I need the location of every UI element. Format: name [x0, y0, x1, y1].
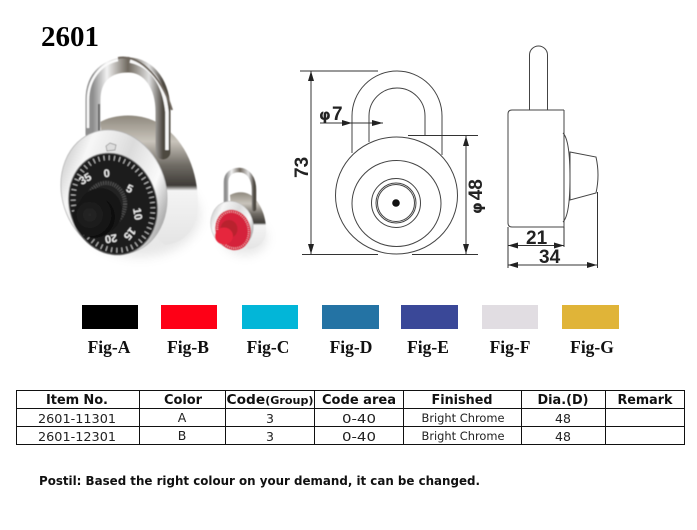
body circles [336, 137, 458, 254]
table row 1: Bright Chrome [422, 411, 504, 425]
black dial [56, 142, 170, 266]
dimension: 34 [508, 192, 598, 268]
small shackle [226, 170, 254, 209]
gate notch [106, 143, 116, 151]
dimension: phi 48: φ48 [466, 179, 487, 214]
table row 1: 48 [555, 411, 571, 426]
dial numbers: 15 [121, 225, 138, 242]
side face and knob [563, 133, 598, 222]
table row 1 [38, 410, 571, 426]
photo: small red combination padlock [205, 170, 267, 255]
dial numbers: 10 [130, 207, 144, 221]
dimension: 21 [508, 227, 564, 268]
chrome face ring [45, 116, 183, 268]
technical drawing: side view [508, 46, 598, 268]
title: 2601 [41, 21, 99, 53]
red dial [210, 205, 256, 255]
dimension: 34: 34 [539, 247, 561, 268]
table header row: Finished [432, 393, 492, 408]
Fig-D: Fig-D [330, 337, 372, 357]
shackle [88, 57, 172, 152]
table row 2: 2601-12301 [38, 429, 116, 444]
dimension: phi 7: 7 [332, 104, 343, 125]
table header row: Remark [618, 393, 673, 408]
side body [508, 110, 564, 227]
colour swatches with labels [82, 305, 619, 357]
dimension: 73: 73 [292, 157, 313, 178]
dial numbers: 5 [124, 183, 135, 196]
dial ticks [61, 147, 165, 261]
Fig-C [242, 305, 298, 357]
table row 1: A [178, 410, 187, 425]
table header row: Code(Group) [226, 393, 314, 408]
Fig-B [161, 305, 217, 357]
red knob [215, 220, 238, 244]
table row 2: 48 [555, 429, 571, 444]
dimension: phi 7 [319, 104, 383, 126]
soft shadow [80, 173, 200, 257]
table header row: Code area [322, 393, 396, 408]
table header row [46, 393, 673, 408]
dial numbers [77, 168, 144, 245]
table header row: Color [164, 393, 203, 408]
Fig-B: Fig-B [167, 337, 209, 357]
table row 2 [38, 428, 571, 444]
Fig-C: Fig-C [247, 337, 289, 357]
small lock body [230, 192, 266, 249]
specification table [16, 390, 684, 444]
Fig-G [562, 305, 619, 357]
Fig-F: Fig-F [490, 337, 530, 357]
table header row: Item No. [46, 393, 108, 408]
Fig-A [82, 305, 138, 357]
table row 1: 3 [266, 411, 274, 426]
knob [73, 180, 128, 238]
small shadow [223, 221, 267, 255]
Fig-G: Fig-G [570, 337, 614, 357]
table row 2: 0-40 [342, 429, 376, 444]
footnote: Postil: Based the right colour on your demand, it can be changed. [39, 474, 480, 488]
Fig-A: Fig-A [88, 337, 131, 357]
dimension: 21: 21 [526, 228, 548, 249]
table row 1: 2601-11301 [38, 411, 116, 426]
table row 1: 0-40 [342, 411, 376, 426]
dimension: phi 48 [408, 136, 487, 254]
lock body [100, 116, 198, 245]
Fig-D [322, 305, 379, 357]
small face ring [205, 196, 259, 254]
Fig-E: Fig-E [407, 337, 449, 357]
dimension: 73 [292, 71, 378, 254]
dial numbers: 20 [104, 231, 118, 245]
Fig-F [482, 305, 538, 357]
table grid [16, 390, 684, 444]
dial numbers: 0 [103, 168, 110, 180]
Fig-E [401, 305, 458, 357]
photo: large black combination padlock [45, 57, 200, 268]
keyhole dot [392, 199, 400, 207]
shackle outline [352, 71, 442, 155]
dial numbers: 35 [77, 171, 94, 188]
technical drawing: front view [292, 71, 487, 254]
table row 2: Bright Chrome [422, 429, 504, 443]
dimension: phi 7: φ [319, 106, 331, 124]
table header row: Dia.(D) [538, 393, 588, 408]
table row 2: 3 [266, 429, 274, 444]
side shackle [530, 46, 548, 110]
table row 2: B [178, 428, 186, 443]
